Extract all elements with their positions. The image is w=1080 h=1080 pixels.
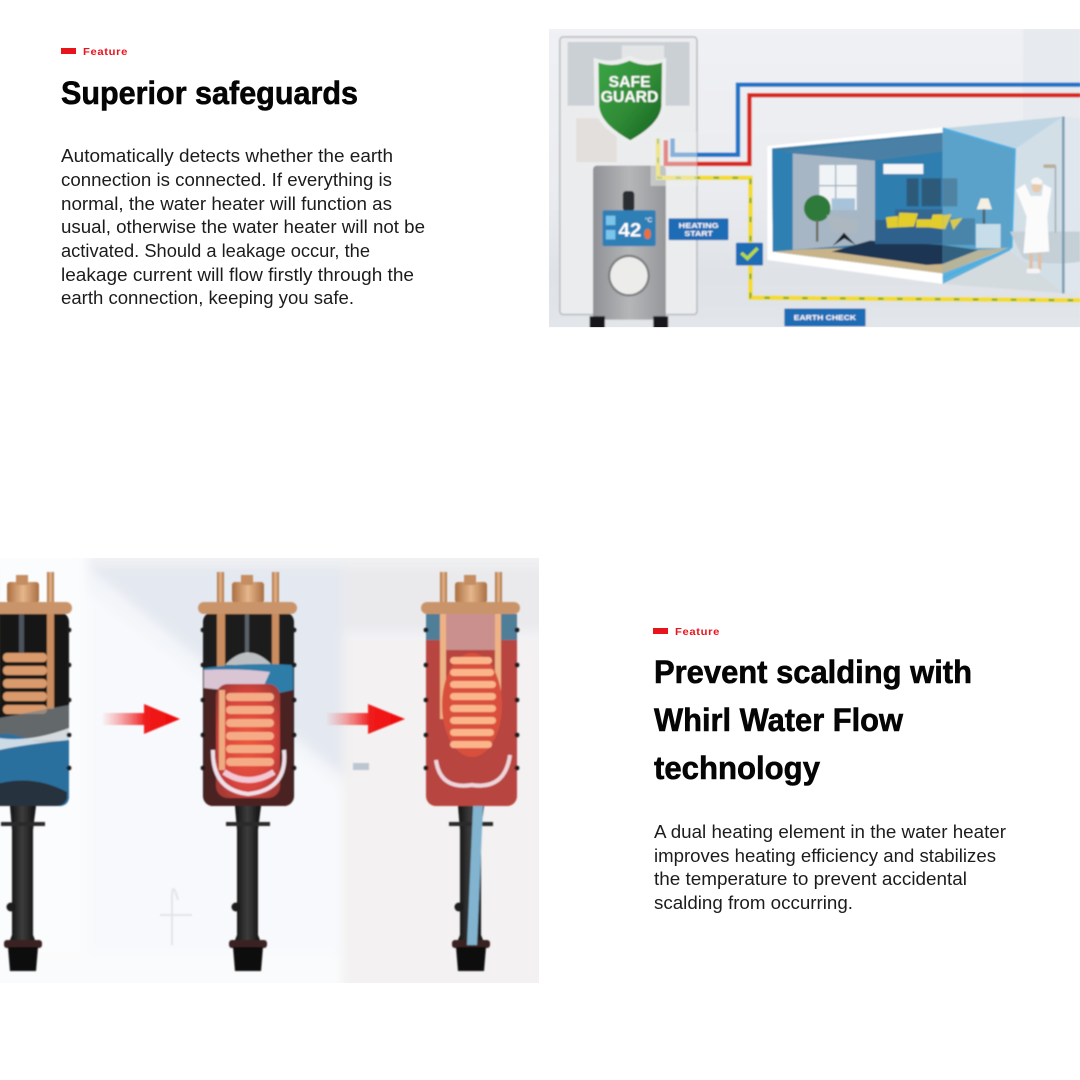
illustration: room cutaway — [767, 117, 1080, 293]
body text: scalding description: the temperature to prevent accidental — [654, 868, 967, 889]
icon: safe guard shield: SAFE — [609, 74, 651, 91]
body text: safeguards description — [61, 145, 425, 308]
icon: safe guard shield — [594, 56, 666, 145]
body text: safeguards description: normal, the water heater will function as — [61, 193, 392, 214]
label: heating start: HEATING — [679, 221, 719, 230]
earth wire — [658, 139, 1080, 300]
pipes: hot and cold — [666, 85, 1080, 164]
heading: Prevent scalding with Whirl Water Flow technology — [654, 654, 972, 786]
water heater back panel — [560, 37, 697, 331]
body text: scalding description — [654, 821, 1006, 913]
label: earth check: EARTH CHECK — [794, 313, 857, 322]
display panel: 42 degrees: °C — [645, 216, 653, 224]
heading: Prevent scalding with Whirl Water Flow technology: Whirl Water Flow — [654, 702, 903, 738]
display panel: 42 degrees: 42 — [618, 221, 641, 242]
heater: water surrounding element — [198, 572, 297, 971]
feature tag — [653, 626, 720, 638]
arrow: red right 2 — [327, 704, 405, 734]
body text: scalding description: scalding from occurring. — [654, 892, 853, 913]
body text: safeguards description: activated. Should a leakage occur, the — [61, 240, 370, 261]
glass bathroom — [943, 117, 1080, 293]
body text: safeguards description: usual, otherwise the water heater will not be — [61, 216, 425, 237]
control knob — [608, 255, 650, 297]
body text: scalding description: improves heating efficiency and stabilizes — [654, 845, 996, 866]
heading: Superior safeguards: Superior safeguards — [61, 75, 358, 111]
feature tag: Feature — [83, 46, 128, 58]
section: prevent scalding text — [653, 626, 1006, 913]
heater: cold water filling — [0, 572, 72, 971]
body text: safeguards description: leakage current will flow firstly through the — [61, 264, 414, 285]
body text: safeguards description: Automatically detects whether the earth — [61, 145, 393, 166]
heading: Prevent scalding with Whirl Water Flow technology: Prevent scalding with — [654, 654, 972, 690]
body text: safeguards description: connection is connected. If everything is — [61, 169, 392, 190]
label: heating start: START — [684, 229, 713, 238]
display panel: 42 degrees — [602, 210, 656, 246]
section: superior safeguards text — [61, 46, 425, 308]
arrow: red right 1 — [103, 704, 180, 734]
icon: safe guard shield: GUARD — [601, 89, 658, 106]
illustration: safeguard water heater and room — [542, 23, 1080, 335]
body text: scalding description: A dual heating element in the water heater — [654, 821, 1006, 842]
feature tag — [61, 46, 128, 58]
feature tag: Feature — [675, 626, 720, 638]
illustration: whirl water flow heating elements — [0, 558, 539, 983]
background: bathroom — [84, 558, 539, 983]
label: earth check — [784, 308, 866, 326]
heater: fully heated element — [421, 572, 520, 971]
heading: Prevent scalding with Whirl Water Flow technology: technology — [654, 750, 820, 786]
living room — [767, 127, 952, 284]
woman in bathrobe — [1016, 177, 1052, 273]
body text: safeguards description: earth connection, keeping you safe. — [61, 287, 354, 308]
icon: check mark — [736, 243, 763, 265]
label: heating start — [669, 218, 728, 240]
